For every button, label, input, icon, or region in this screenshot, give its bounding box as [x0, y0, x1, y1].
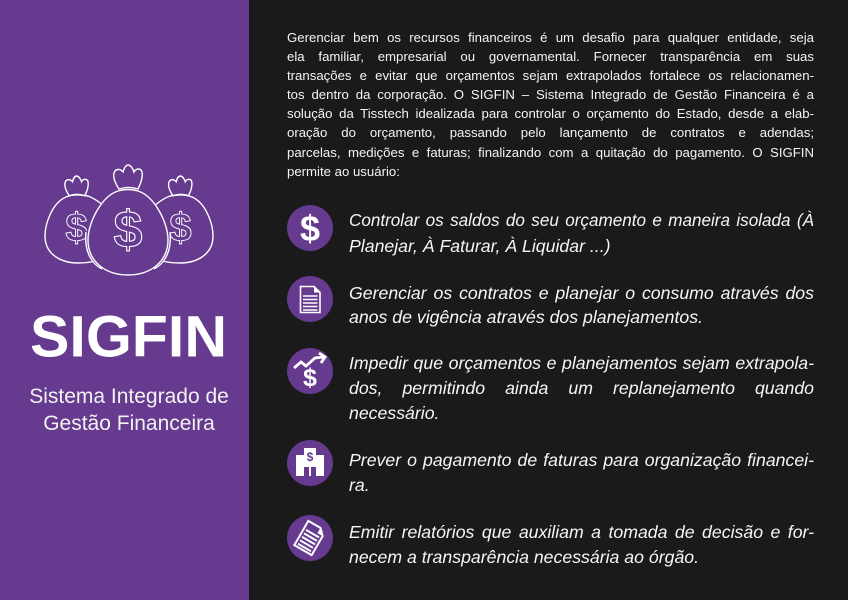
icon: three money bags	[44, 164, 214, 276]
text: feature 2: anos de vigência através dos planejamentos.	[349, 307, 703, 327]
text: feature 4	[349, 450, 814, 495]
subtitle: Gestão Financeira	[43, 412, 215, 435]
text: feature 5: necem a transparência necessária ao órgão.	[349, 547, 699, 567]
text: feature 4: ra.	[349, 475, 370, 495]
text: feature 5	[349, 522, 814, 567]
text: feature 3	[349, 353, 814, 423]
text: feature 1: Controlar os saldos do seu orçamento e maneira isolada (À	[349, 211, 814, 230]
icon: rising arrow with dollar: $	[303, 364, 317, 392]
text: feature 3: necessário.	[349, 403, 439, 423]
text: feature 4: Prever o pagamento de faturas para organização financei-	[349, 450, 814, 470]
text block: introduction: oração do orçamento, passando pelo lançamento de contratos e adendas;	[287, 125, 814, 140]
text block: introduction: solução da Tisstech idealizada para controlar o orçamento do Estado, desde a elab-	[287, 106, 814, 121]
text: feature 5: Emitir relatórios que auxiliam a tomada de decisão e for-	[349, 522, 814, 542]
panel: left purple sidebar	[0, 0, 249, 600]
text: feature 3: dos, permitindo ainda um replanejamento quando	[349, 378, 814, 398]
icon: three money bags: $	[169, 206, 192, 250]
icon: tilted report	[287, 515, 333, 561]
subtitle: Sistema Integrado de	[29, 385, 229, 408]
title: SIGFIN	[30, 304, 227, 370]
text block: introduction: parcelas, medições e faturas; finalizando com a quitação do pagamento. O SIGFIN	[287, 145, 814, 160]
icon: dollar sign: $	[300, 208, 320, 249]
subtitle	[29, 385, 229, 435]
text block: introduction: Gerenciar bem os recursos financeiros é um desafio para qualquer entidade, seja	[287, 30, 814, 45]
text: feature 3: Impedir que orçamentos e planejamentos sejam extrapola-	[349, 353, 814, 373]
icon: rising arrow with dollar	[287, 348, 333, 394]
text block: introduction: transações e evitar que orçamentos sejam extrapolados fortalece os relacionamen-	[287, 68, 814, 83]
text block: introduction	[287, 30, 814, 179]
text: feature 2	[349, 283, 814, 327]
text block: introduction: ela familiar, empresarial ou governamental. Fornecer transparência em suas	[287, 49, 814, 64]
icon: three money bags: $	[65, 206, 88, 250]
icon: bank building: $	[307, 450, 314, 464]
text block: introduction: tos dentro da corporação. O SIGFIN – Sistema Integrado de Gestão Financeira é a	[287, 87, 814, 102]
text block: introduction: permite ao usuário:	[287, 164, 400, 179]
icon: document	[287, 276, 333, 322]
text: feature 1: Planejar, À Faturar, À Liquidar ...)	[349, 236, 611, 256]
icon: three money bags: $	[114, 201, 143, 259]
icon: bank building	[287, 440, 333, 486]
text: feature 2: Gerenciar os contratos e planejar o consumo através dos	[349, 283, 814, 303]
text: feature 1	[349, 210, 814, 256]
icon: dollar sign	[287, 205, 333, 251]
